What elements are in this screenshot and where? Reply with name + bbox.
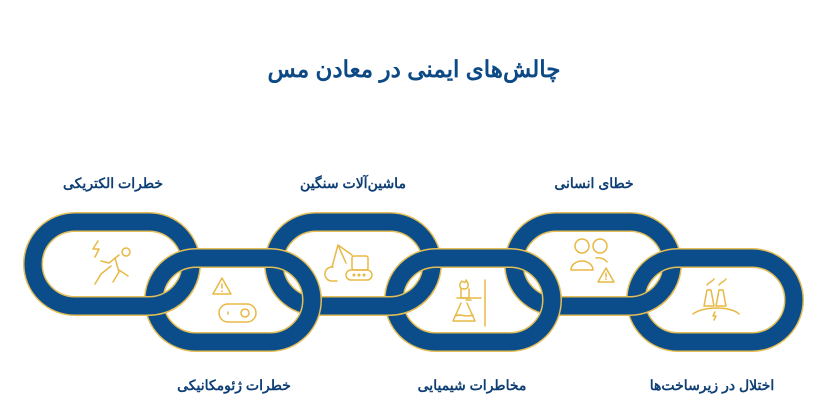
label: heavy machinery: ماشین‌آلات سنگین <box>300 175 406 191</box>
overlapping bands <box>118 284 667 306</box>
label: chemical: مخاطرات شیمیایی <box>418 377 526 393</box>
icon: chemical flask flame <box>453 280 485 326</box>
icon: electric shock <box>93 241 130 284</box>
label: geomechanical: خطرات ژئومکانیکی <box>177 377 291 393</box>
label: human error: خطای انسانی <box>554 175 634 191</box>
label: infrastructure: اختلال در زیرساخت‌ها <box>650 377 774 393</box>
icon: power plant <box>693 279 739 320</box>
icon: excavator <box>325 245 372 281</box>
icon: people with warning <box>571 239 614 282</box>
title: چالش‌های ایمنی در معادن مس <box>267 56 561 82</box>
label: electrical: خطرات الکتریکی <box>63 175 163 191</box>
bottom links <box>154 258 794 342</box>
top links <box>33 222 672 306</box>
icon: warning triangle with belt <box>213 278 256 322</box>
